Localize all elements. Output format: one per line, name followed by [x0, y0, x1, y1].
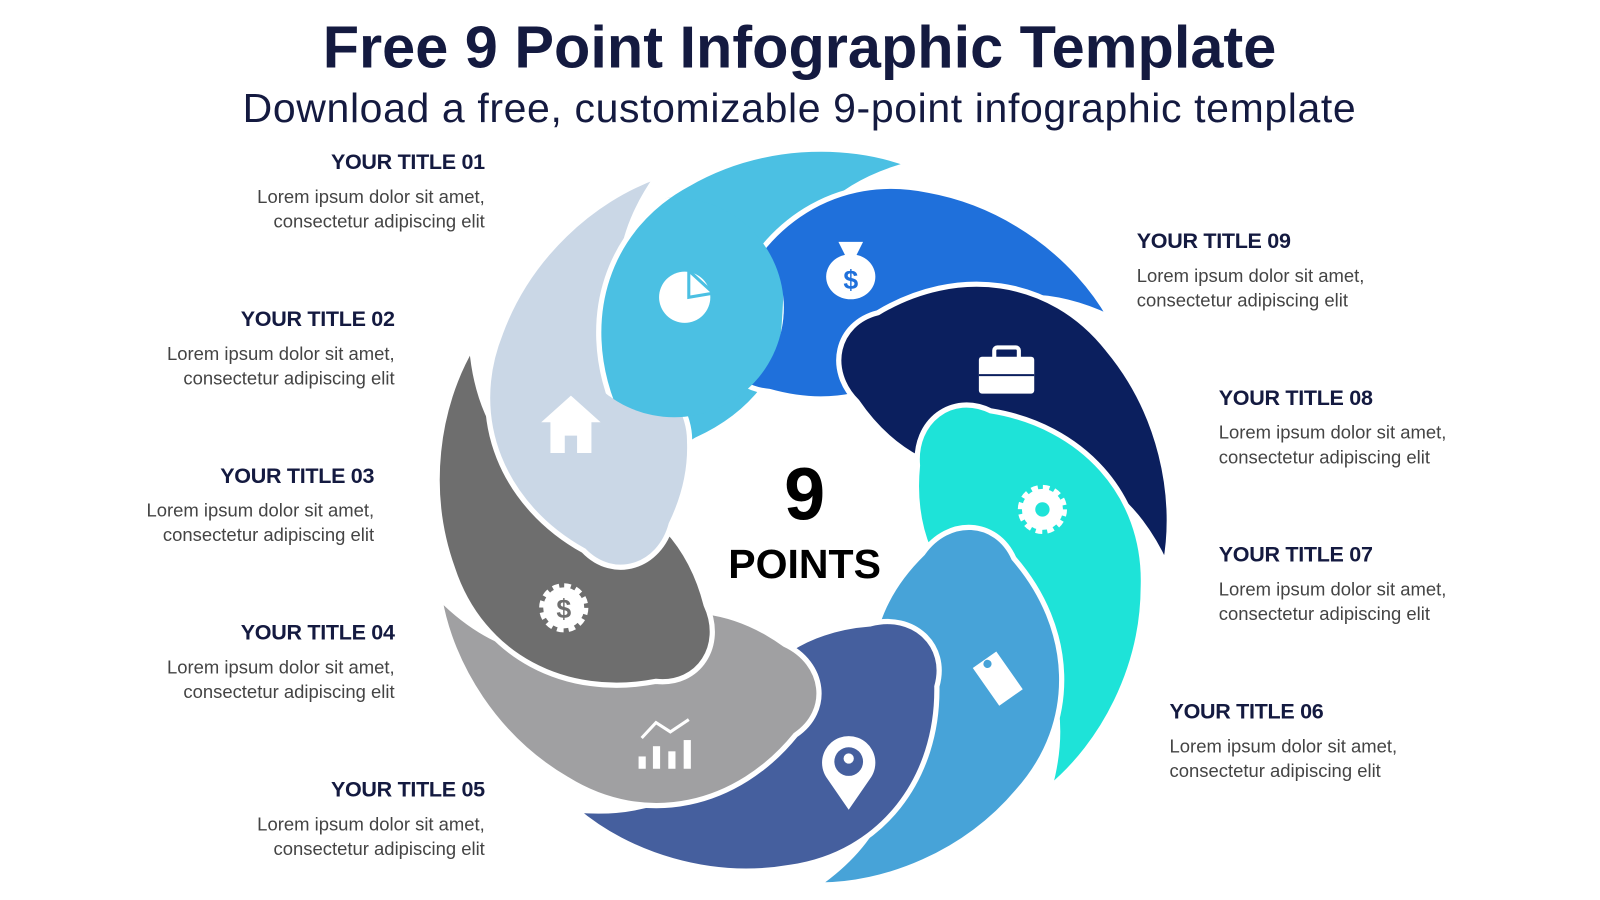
- text: title 02: Lorem ipsum dolor sit amet,: [167, 343, 395, 364]
- icon: dollar gear: [543, 587, 584, 628]
- text: title 01: Lorem ipsum dolor sit amet,: [257, 187, 485, 207]
- icon: money bag: $: [843, 265, 858, 295]
- icon: house: [541, 396, 601, 453]
- text: title 06: consectetur adipiscing elit: [1170, 761, 1381, 781]
- text: title 07: [1219, 543, 1446, 624]
- petal 06: [760, 515, 1093, 889]
- icon: pie chart: [659, 271, 713, 323]
- icon: tag: [965, 640, 1023, 706]
- icon: location pin: [822, 736, 875, 810]
- text: title 09: consectetur adipiscing elit: [1137, 290, 1348, 311]
- text: title 04: Lorem ipsum dolor sit amet,: [167, 657, 395, 678]
- text: title 07: Lorem ipsum dolor sit amet,: [1219, 579, 1446, 600]
- text: title 07: YOUR TITLE 07: [1219, 543, 1373, 567]
- text: title 09: [1137, 230, 1364, 311]
- icon: briefcase: [979, 347, 1034, 394]
- text: title 03: consectetur adipiscing elit: [163, 525, 374, 545]
- petal 03: [373, 346, 779, 722]
- text: title 05: [257, 778, 485, 859]
- center label: POINTS: [728, 541, 881, 587]
- text: title 06: [1170, 700, 1397, 781]
- text: title 02: YOUR TITLE 02: [241, 308, 395, 331]
- subtitle: Download a free, customizable 9-point infographic template: [243, 86, 1356, 131]
- petal 08: [839, 284, 1169, 564]
- text: title 06: Lorem ipsum dolor sit amet,: [1170, 736, 1397, 756]
- text: title 02: consectetur adipiscing elit: [183, 368, 395, 388]
- text: title 04: [167, 621, 395, 702]
- text: title 05: Lorem ipsum dolor sit amet,: [257, 814, 485, 834]
- title: Free 9 Point Infographic Template: [323, 14, 1276, 81]
- text: title 02: [167, 308, 395, 388]
- petal 01: [577, 112, 910, 486]
- text: title 08: Lorem ipsum dolor sit amet,: [1219, 422, 1446, 443]
- text: title 05: consectetur adipiscing elit: [274, 838, 485, 859]
- icon: money bag: [826, 242, 875, 299]
- text: title 01: consectetur adipiscing elit: [274, 211, 485, 232]
- text: title 01: YOUR TITLE 01: [331, 151, 485, 174]
- text: title 01: [257, 151, 485, 232]
- center label: 9: [784, 453, 825, 536]
- text: title 04: YOUR TITLE 04: [241, 621, 395, 645]
- petal 09: [680, 101, 1113, 527]
- center label: [728, 453, 881, 587]
- petal 07: [799, 364, 1232, 790]
- petal 02: [413, 173, 821, 599]
- text: title 05: YOUR TITLE 05: [331, 778, 485, 802]
- text: title 09: YOUR TITLE 09: [1137, 230, 1291, 253]
- text: title 07: consectetur adipiscing elit: [1219, 604, 1430, 624]
- icon: bar chart: [639, 720, 691, 769]
- petal 04: [436, 486, 842, 861]
- icon: gear: [1022, 489, 1063, 530]
- text: title 03: Lorem ipsum dolor sit amet,: [146, 500, 374, 521]
- spiral chart: [440, 152, 1167, 882]
- petal 05: [574, 527, 981, 900]
- text: title 08: consectetur adipiscing elit: [1219, 447, 1430, 467]
- text: title 03: YOUR TITLE 03: [220, 464, 374, 488]
- text: title 06: YOUR TITLE 06: [1170, 700, 1323, 724]
- text: title 09: Lorem ipsum dolor sit amet,: [1137, 265, 1364, 286]
- text: title 03: [146, 464, 374, 545]
- petal 01 head overlay: [596, 198, 784, 418]
- text: title 08: YOUR TITLE 08: [1219, 386, 1373, 410]
- icon: dollar gear: $: [556, 594, 571, 624]
- text: title 08: [1219, 386, 1446, 468]
- text: title 04: consectetur adipiscing elit: [183, 682, 395, 702]
